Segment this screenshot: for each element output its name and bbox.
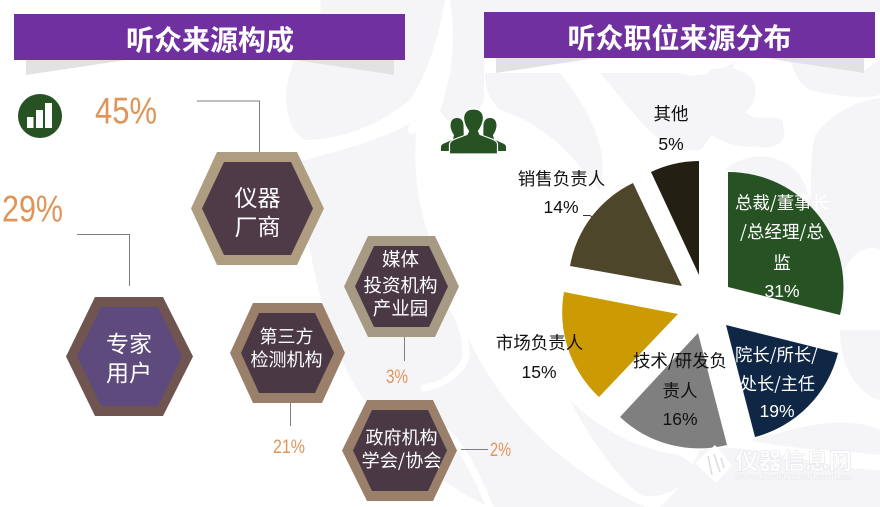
hexagon: third-party testing: 检测机构 (250, 346, 322, 372)
hexagon: expert users: 专家 (106, 325, 152, 359)
callout: 3 percent (386, 337, 408, 388)
callout: 45 percent with leader line (95, 90, 260, 152)
pie chart (562, 161, 843, 448)
hexagon: expert users: 用户 (106, 354, 152, 388)
hexagon: third-party testing (230, 303, 345, 403)
icon: group of people (441, 109, 506, 154)
hexagon: government and associations (342, 400, 457, 501)
label: other (654, 101, 688, 154)
hexagon: expert users (66, 297, 193, 416)
panel: audience job distribution (441, 12, 875, 448)
callout: 21 percent (273, 403, 305, 458)
slice: directors 19 percent (726, 325, 838, 437)
label: directors: 院长/所长/ (735, 342, 818, 367)
heading: left title banner (14, 14, 405, 75)
label: executives: /总经理/总 (740, 219, 824, 244)
watermark: instrument network logo: 仪器信息网 (735, 442, 852, 476)
label: R and D: 技术/研发负 (633, 348, 727, 373)
hexagon: media and investors: 产业园 (373, 295, 428, 321)
hexagon: media and investors (344, 236, 459, 337)
label: other: 其他 (654, 101, 688, 126)
label: R and D (633, 348, 727, 429)
hexagon: instrument makers: 厂商 (234, 208, 280, 242)
label: other: 5% (658, 134, 684, 154)
label: directors (735, 342, 818, 421)
callout: 2 percent (461, 439, 511, 461)
callout: 21 percent: 21% (273, 436, 305, 458)
hexagon: third-party testing: 第三方 (260, 323, 314, 349)
hexagon: instrument makers: 仪器 (234, 179, 280, 213)
label: directors: 处长/主任 (740, 371, 815, 396)
heading: right title banner (484, 12, 875, 73)
label: directors: 19% (759, 401, 795, 421)
heading: right title banner: 听众职位来源分布 (567, 17, 792, 57)
callout: 45 percent with leader line: 45% (95, 90, 157, 132)
slice: marketing 15 percent (562, 292, 678, 397)
label: sales (518, 166, 605, 217)
label: executives (735, 190, 829, 301)
callout: 29 percent with leader line (2, 188, 130, 286)
label: marketing: 市场负责人 (496, 330, 583, 355)
label: executives: 监 (773, 250, 791, 275)
hexagon: instrument makers (191, 152, 324, 265)
hexagon: government and associations: 政府机构 (366, 424, 438, 450)
slice: R and D 16 percent (620, 333, 727, 448)
callout: 2 percent: 2% (490, 439, 511, 461)
watermark: instrument network logo (695, 442, 852, 483)
label: R and D: 16% (662, 409, 698, 429)
hexagon: media and investors: 媒体 (382, 246, 419, 272)
label: marketing: 15% (521, 362, 557, 382)
hexagon: media and investors: 投资机构 (363, 272, 438, 298)
label: sales: 14% (543, 197, 579, 217)
icon: bar chart badge (18, 94, 62, 138)
label: R and D: 责人 (662, 378, 698, 403)
heading: left title banner: 听众来源构成 (126, 19, 294, 59)
label: marketing (496, 330, 583, 382)
slice: executives 31 percent (728, 172, 843, 315)
panel: audience source composition (2, 14, 511, 501)
label: executives: 31% (764, 281, 800, 301)
watermark: instrument network logo: www.instrument.com.cn (734, 472, 852, 482)
label: executives: 总裁/董事长 (735, 190, 829, 215)
slice: sales 14 percent (570, 183, 682, 286)
hexagon: government and associations: 学会/协会 (362, 447, 442, 473)
slice: other 5 percent (651, 161, 699, 275)
callout: 29 percent with leader line: 29% (2, 188, 63, 230)
callout: 3 percent: 3% (386, 366, 408, 388)
label: sales: 销售负责人 (518, 166, 605, 191)
